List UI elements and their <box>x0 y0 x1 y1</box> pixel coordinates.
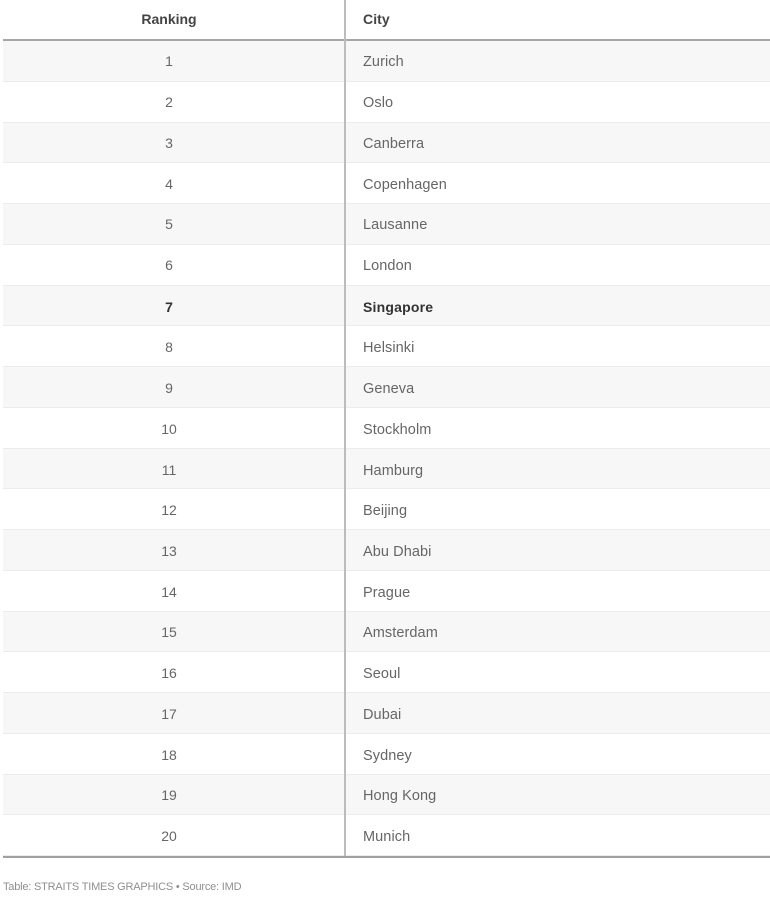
row 9: Geneva: Geneva <box>363 381 414 397</box>
row 17: Dubai <box>3 693 770 734</box>
header row <box>141 11 390 27</box>
row 20: Munich: Munich <box>363 829 410 845</box>
row 7: Singapore (highlighted): 7 <box>165 298 173 314</box>
header rule <box>3 39 770 41</box>
source credit: Table: STRAITS TIMES GRAPHICS • Source: IMD <box>3 881 241 893</box>
row 18: Sydney: Sydney <box>363 748 412 764</box>
header row: City <box>363 11 390 27</box>
row 5: Lausanne <box>3 204 770 245</box>
row 16: Seoul: 16 <box>161 665 177 681</box>
row 4: Copenhagen <box>3 163 770 204</box>
row 5: Lausanne: 5 <box>165 216 173 232</box>
row 2: Oslo <box>3 82 770 122</box>
row 3: Canberra: Canberra <box>363 136 424 152</box>
row 12: Beijing <box>3 489 770 530</box>
row 16: Seoul: Seoul <box>363 666 400 682</box>
row 1: Zurich <box>3 41 770 82</box>
row 1: Zurich: Zurich <box>363 54 404 70</box>
row 15: Amsterdam <box>3 612 770 652</box>
row 2: Oslo: Oslo <box>363 95 393 111</box>
row 11: Hamburg <box>3 448 770 489</box>
row 8: Helsinki <box>3 326 770 367</box>
row 19: Hong Kong: Hong Kong <box>363 788 436 804</box>
row 13: Abu Dhabi: Abu Dhabi <box>363 544 431 560</box>
bottom rule <box>3 856 770 858</box>
row 15: Amsterdam: 15 <box>161 624 177 640</box>
row 20: Munich <box>3 815 770 856</box>
row 3: Canberra: 3 <box>165 134 173 150</box>
row 14: Prague: 14 <box>161 584 177 600</box>
row 4: Copenhagen: Copenhagen <box>363 177 447 193</box>
column divider <box>344 0 346 856</box>
row 6: London: 6 <box>165 257 173 273</box>
row 1: Zurich: 1 <box>165 53 173 69</box>
row 6: London: London <box>363 258 412 274</box>
row 17: Dubai: 17 <box>161 706 177 722</box>
row 18: Sydney <box>3 734 770 774</box>
row 16: Seoul <box>3 652 770 693</box>
row 13: Abu Dhabi <box>3 530 770 571</box>
row 11: Hamburg: Hamburg <box>363 462 423 478</box>
row 8: Helsinki: 8 <box>165 339 173 355</box>
row 14: Prague <box>3 571 770 612</box>
row 14: Prague: Prague <box>363 585 410 601</box>
row 19: Hong Kong: 19 <box>161 786 177 802</box>
row 7: Singapore (highlighted) <box>3 286 770 326</box>
row 2: Oslo: 2 <box>165 94 173 110</box>
header row: Ranking <box>141 11 197 27</box>
row 9: Geneva <box>3 367 770 408</box>
row 18: Sydney: 18 <box>161 747 177 763</box>
row 10: Stockholm: Stockholm <box>363 422 431 438</box>
row 11: Hamburg: 11 <box>162 462 176 478</box>
row 17: Dubai: Dubai <box>363 707 401 723</box>
row 19: Hong Kong <box>3 774 770 815</box>
row 12: Beijing: Beijing <box>363 503 407 519</box>
row 10: Stockholm: 10 <box>161 421 177 437</box>
row 8: Helsinki: Helsinki <box>363 340 414 356</box>
row 6: London <box>3 245 770 286</box>
row 10: Stockholm <box>3 408 770 448</box>
row 4: Copenhagen: 4 <box>165 176 173 192</box>
row 13: Abu Dhabi: 13 <box>161 543 177 559</box>
row 7: Singapore (highlighted): Singapore <box>363 298 433 314</box>
row 20: Munich: 20 <box>161 828 177 844</box>
row 3: Canberra <box>3 122 770 163</box>
row 5: Lausanne: Lausanne <box>363 217 427 233</box>
row 12: Beijing: 12 <box>161 502 177 518</box>
row 15: Amsterdam: Amsterdam <box>363 624 438 640</box>
row 9: Geneva: 9 <box>165 380 173 396</box>
